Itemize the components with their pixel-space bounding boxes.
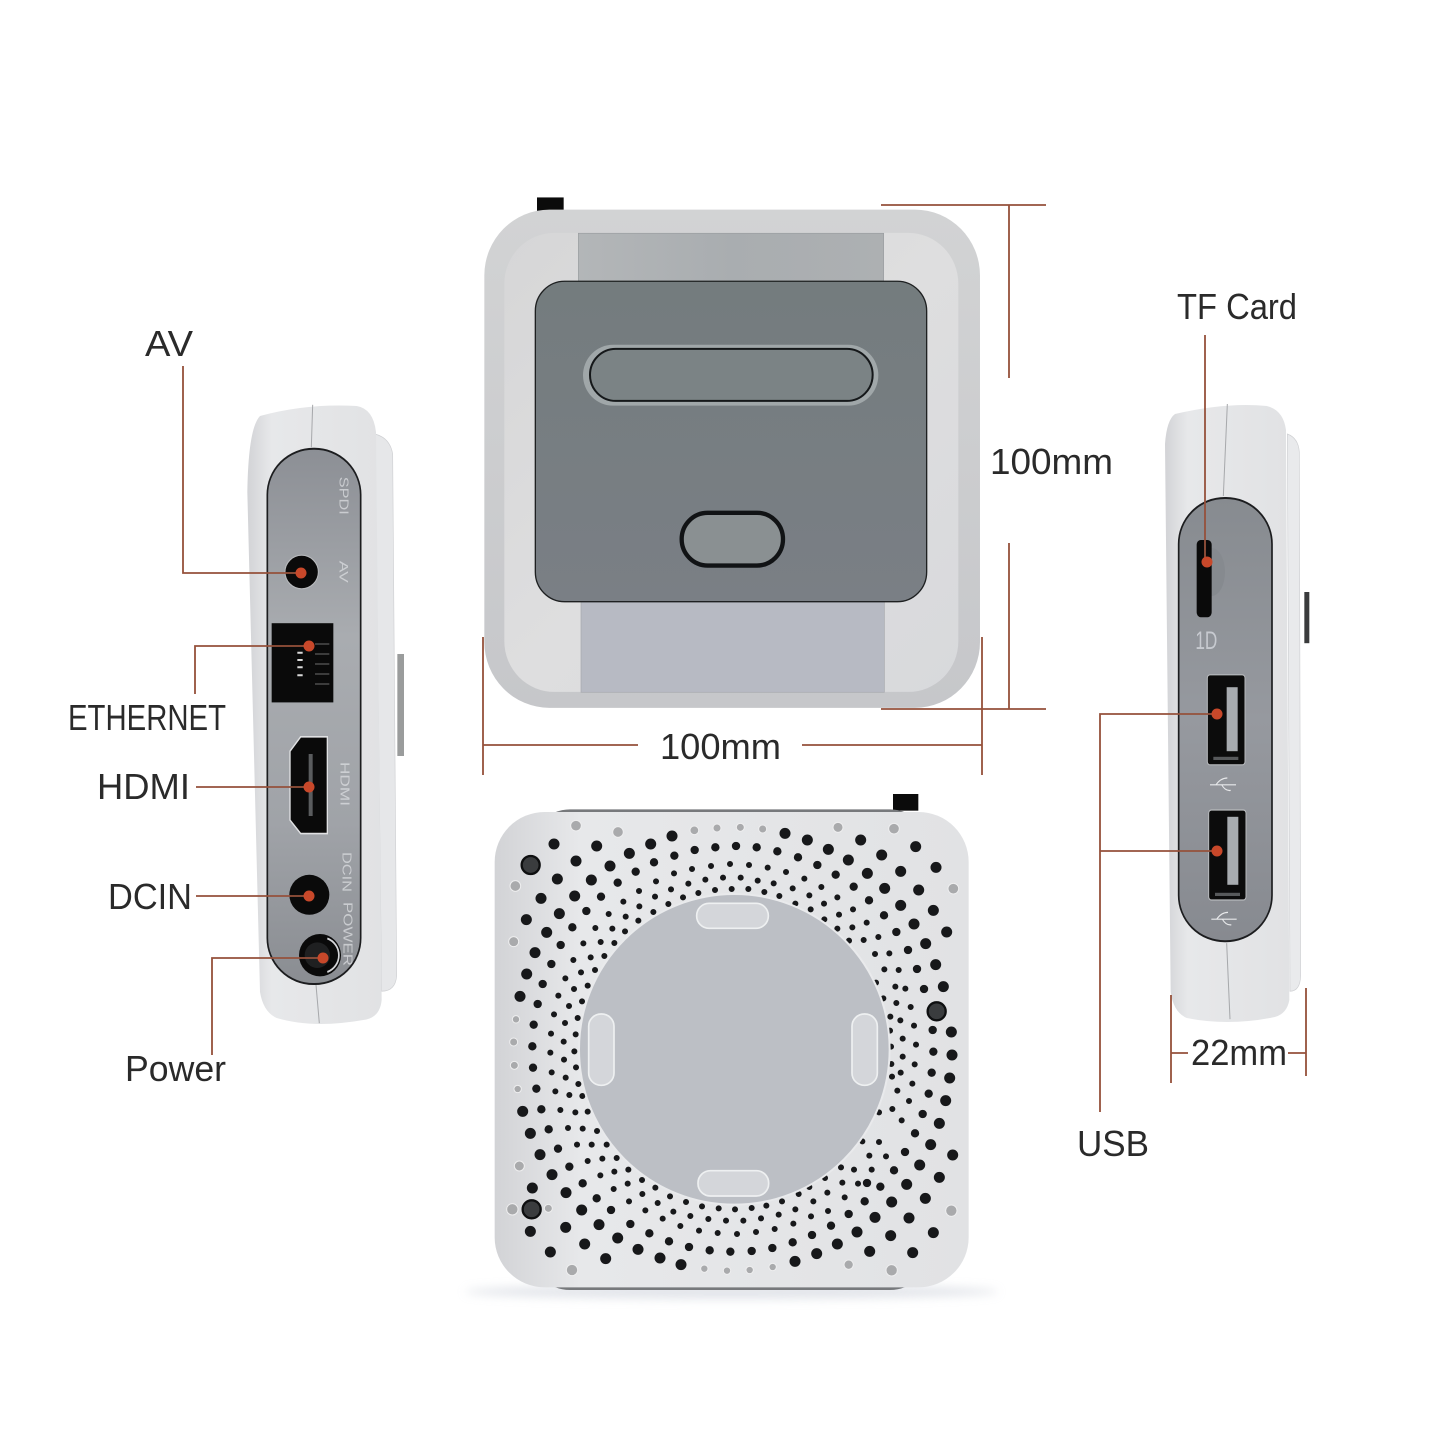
dimension: depth 22mm <box>1171 988 1306 1083</box>
slot cover <box>590 349 873 401</box>
round base plate <box>579 894 890 1205</box>
callout: USB: USB <box>1077 1123 1149 1164</box>
outer shell <box>484 210 980 708</box>
lower cartridge strip <box>581 601 884 692</box>
port panel <box>267 449 361 984</box>
TF glyph: 1D <box>1195 626 1217 654</box>
callout: AV <box>145 323 306 578</box>
switch tab <box>893 794 918 811</box>
upper cartridge strip <box>578 233 884 282</box>
label HDMI: HDMI <box>337 762 352 806</box>
callout: ethernet: ETHERNET <box>68 697 226 738</box>
ethernet jack <box>272 623 333 702</box>
device: left side ports <box>247 405 404 1024</box>
ground shadow <box>465 1284 998 1299</box>
rubber foot: right <box>852 1014 877 1085</box>
USB port 1 <box>1207 675 1245 765</box>
callout: power <box>125 952 328 1089</box>
label DCIN: DCIN <box>340 852 354 892</box>
blind grey holes <box>507 820 959 1276</box>
rear cover strip <box>375 434 397 991</box>
side switch <box>1304 592 1309 643</box>
card recess <box>1198 548 1225 596</box>
rear cover strip <box>1287 434 1301 991</box>
underside shell <box>495 812 969 1287</box>
callout: HDMI: HDMI <box>97 766 190 807</box>
seam bottom <box>1227 943 1230 1019</box>
callout: TF card <box>1177 286 1297 568</box>
rubber foot: bottom <box>698 1171 769 1196</box>
grey top panel <box>535 281 927 602</box>
callout: HDMI <box>97 766 314 807</box>
USB symbol 1 <box>1210 778 1236 790</box>
power switch tab <box>537 197 564 214</box>
port panel <box>1179 498 1272 941</box>
side switch <box>397 654 404 756</box>
AV jack <box>285 555 318 589</box>
callout: ethernet <box>68 640 314 738</box>
power button <box>299 934 341 976</box>
seam top <box>311 405 313 447</box>
callout: DCIN: DCIN <box>108 876 192 917</box>
callout: DCIN <box>108 876 314 917</box>
large vent holes <box>520 833 953 1265</box>
callout: USB <box>1077 708 1222 1164</box>
USB port 2 <box>1209 810 1246 900</box>
small vent holes <box>550 864 916 1234</box>
label SPDI: SPDI <box>337 477 351 515</box>
shell <box>1165 405 1289 1022</box>
USB symbol 2 <box>1211 912 1237 925</box>
device: right side ports <box>1165 404 1309 1022</box>
seam top <box>1223 404 1227 496</box>
callout: TF card: TF Card <box>1177 286 1297 327</box>
device: underside <box>465 794 998 1299</box>
eject button <box>682 513 783 566</box>
dimension: height 100mm: 100mm <box>990 441 1113 482</box>
dimension: width 100mm <box>483 637 982 775</box>
device: top view <box>484 197 980 708</box>
shell <box>247 405 382 1024</box>
DC jack <box>289 875 329 915</box>
TF slot <box>1197 540 1212 617</box>
label AV: AV <box>337 561 350 583</box>
dimension: height 100mm <box>881 205 1113 709</box>
label POWER: POWER <box>341 902 355 966</box>
seam bottom <box>316 985 319 1023</box>
dimension: depth 22mm: 22mm <box>1191 1032 1287 1073</box>
rubber foot: top <box>697 903 768 928</box>
medium vent holes <box>532 846 933 1252</box>
bottom edge <box>530 809 930 1290</box>
screw recesses <box>522 856 946 1218</box>
HDMI jack <box>290 737 327 834</box>
callout: AV: AV <box>145 323 193 364</box>
rubber foot: left <box>589 1014 614 1085</box>
dimension: width 100mm: 100mm <box>660 726 781 767</box>
callout: power: Power <box>125 1048 226 1089</box>
inner shell <box>504 233 958 692</box>
slot rim <box>583 345 878 406</box>
